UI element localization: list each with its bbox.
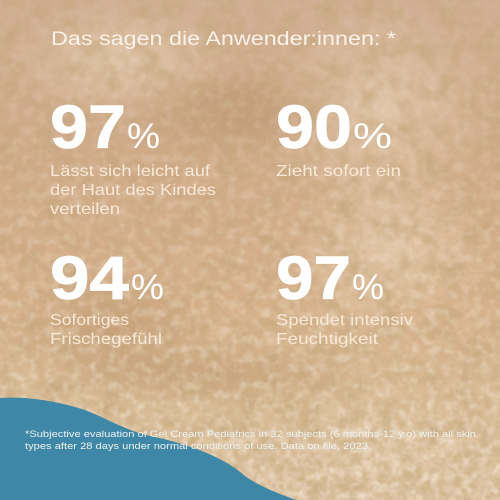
label text: verteilen: [50, 201, 120, 218]
value 90 percent: %: [353, 117, 392, 156]
title: Das sagen die Anwender:innen: *: [51, 29, 397, 50]
stat: 90% absorbs immediately: [276, 93, 401, 180]
label text: [276, 312, 413, 348]
value 97 percent: 97: [50, 93, 126, 161]
label text: Sofortiges: [50, 312, 129, 329]
stat: 97% easy to spread: [50, 93, 216, 218]
footnote: [25, 429, 476, 451]
water: blue area bottom left: [0, 398, 296, 500]
footnote: types after 28 days under normal conditions of use. Data on file, 2023.: [25, 441, 371, 451]
value 90 percent: [276, 93, 392, 161]
footnote: *Subjective evaluation of Gel Cream Pediatrics in 32 subjects (6 months-12 y.o) with all skin: [25, 429, 476, 439]
value 97 percent: 97: [276, 244, 351, 312]
value 97 percent: %: [127, 117, 160, 156]
stat: 94% freshness: [50, 244, 164, 348]
value 94 percent: 94: [50, 244, 129, 312]
label text: Feuchtigkeit: [276, 331, 379, 348]
value 90 percent: 90: [276, 93, 352, 161]
label text: der Haut des Kindes: [50, 182, 216, 199]
label text: Lässt sich leicht auf: [50, 163, 211, 180]
label text: Zieht sofort ein: [276, 163, 401, 180]
label text: Spendet intensiv: [276, 312, 413, 329]
label text: [50, 163, 216, 218]
value 97 percent: %: [352, 268, 384, 307]
value 94 percent: %: [131, 268, 164, 307]
value 97 percent: [276, 244, 384, 312]
label text: [50, 312, 162, 348]
value 94 percent: [50, 244, 164, 312]
value 97 percent: [50, 93, 160, 161]
stat: 97% intense hydration: [276, 244, 413, 348]
label text: Frischegefühl: [50, 331, 162, 348]
